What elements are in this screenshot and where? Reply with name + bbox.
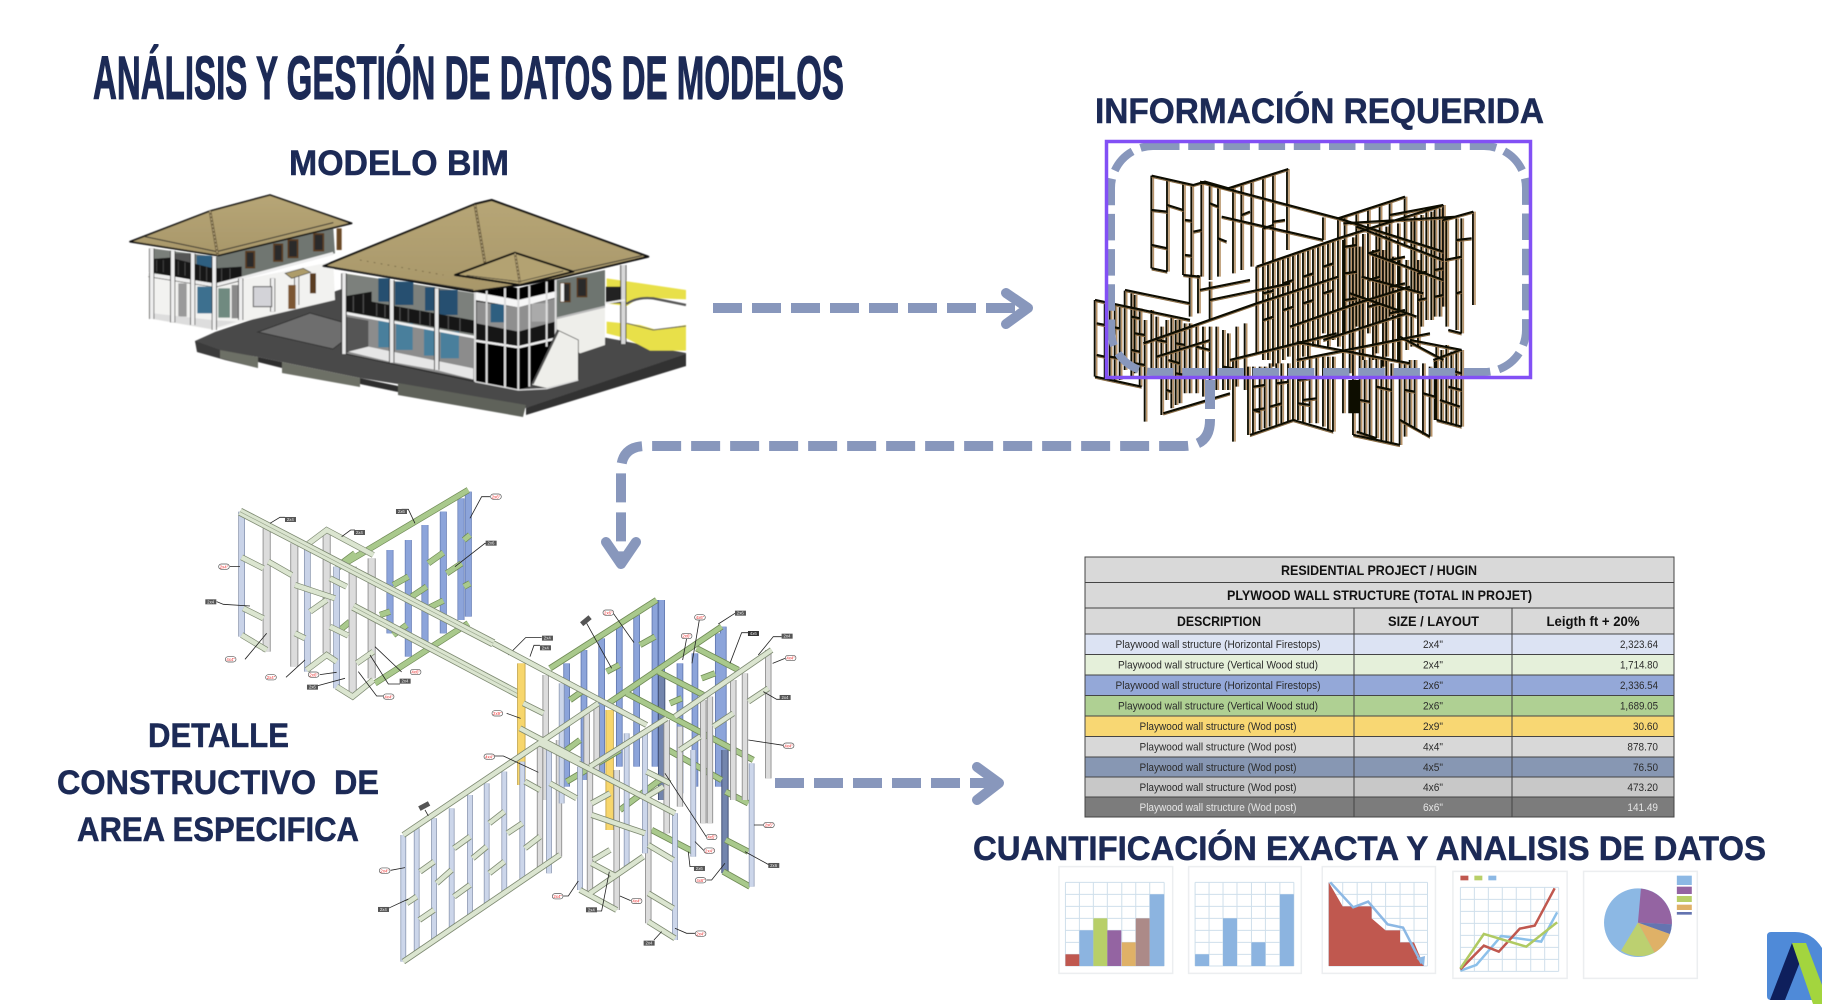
leader lines and tags: 4x4" bbox=[384, 694, 393, 699]
table: plywood wall structure quantities: Leigth ft + 20% bbox=[1546, 613, 1640, 629]
leader lines and tags: 4x6" bbox=[696, 878, 705, 883]
table: plywood wall structure quantities: 4x5" bbox=[1423, 762, 1443, 774]
illustration: detailed wall framing, left cluster bbox=[205, 490, 553, 699]
leader lines and tags: 4x6" bbox=[696, 615, 705, 620]
table: plywood wall structure quantities: Playwood wall structure (Wod post) bbox=[1140, 742, 1296, 754]
leader lines and tags: 4x4" bbox=[786, 656, 795, 661]
arrow: model to required information bbox=[713, 293, 1028, 324]
blue studs bbox=[567, 600, 723, 793]
grey studs bbox=[267, 528, 372, 697]
leader lines and tags: 2x9" bbox=[493, 711, 502, 716]
table: plywood wall structure quantities: 141.49 bbox=[1627, 802, 1658, 814]
leader lines and tags: 4x4" bbox=[485, 754, 494, 759]
table: plywood wall structure quantities: 6x6" bbox=[1423, 802, 1443, 814]
right house bbox=[323, 200, 686, 390]
long beams bbox=[240, 512, 523, 697]
table: plywood wall structure quantities: Playwood wall structure (Horizontal Firestops) bbox=[1116, 680, 1320, 692]
table: plywood wall structure quantities: 1,689.05 bbox=[1620, 700, 1658, 712]
mini charts row bbox=[1059, 867, 1697, 978]
data rows: Playwood wall structure (Horizontal Firestops) bbox=[1116, 639, 1320, 651]
leader lines and tags: 4x4" bbox=[632, 899, 641, 904]
leader lines and tags: 2x4 bbox=[207, 599, 215, 604]
table: plywood wall structure quantities: 2x6" bbox=[1423, 700, 1443, 712]
leader lines and tags: 2x4" bbox=[220, 564, 229, 569]
leader lines and tags: 2x6" bbox=[604, 610, 613, 615]
table: plywood wall structure quantities: 76.50 bbox=[1633, 762, 1658, 774]
leader lines and tags: 2x4 bbox=[544, 636, 551, 641]
table: plywood wall structure quantities: 1,714.80 bbox=[1620, 660, 1658, 672]
chart: pie with legend bbox=[1584, 871, 1697, 978]
table: plywood wall structure quantities: SIZE / LAYOUT bbox=[1388, 613, 1479, 629]
table: plywood wall structure quantities: 2x4" bbox=[1423, 639, 1443, 651]
leader lines and tags: 2x6" bbox=[309, 672, 318, 677]
chart: three-line graph bbox=[1453, 871, 1567, 978]
green plates bbox=[550, 600, 753, 887]
ground slab and footings bbox=[195, 288, 686, 417]
leader lines and tags: 2x6" bbox=[682, 634, 691, 639]
green plates bbox=[337, 490, 470, 683]
heading: detalle constructivo de area especifica: CONSTRUCTIVO DE bbox=[57, 764, 379, 802]
table: plywood wall structure quantities: 473.20 bbox=[1627, 782, 1658, 794]
table: plywood wall structure quantities: Playwood wall structure (Wod post) bbox=[1140, 721, 1296, 733]
pale blue studs bbox=[403, 683, 752, 962]
leader lines and tags: 2x4" bbox=[705, 848, 714, 853]
row backgrounds bbox=[1085, 557, 1674, 817]
heading: información requerida: INFORMACIÓN REQUERIDA bbox=[1095, 91, 1544, 131]
table: plywood wall structure quantities: Playwood wall structure (Vertical Wood stud) bbox=[1118, 660, 1318, 672]
heading: detalle constructivo de area especifica bbox=[57, 717, 379, 849]
leader lines and tags: 4x6" bbox=[411, 670, 420, 675]
leader lines and tags: 2x4" bbox=[553, 894, 562, 899]
leader lines and tags: 2x4 bbox=[783, 634, 791, 639]
table: plywood wall structure quantities: 2,323.64 bbox=[1620, 639, 1658, 651]
illustration: detailed wall framing, right cluster bbox=[378, 600, 796, 962]
heading: cuantificación exacta y analisis de datos: CUANTIFICACIÓN EXACTA Y ANALISIS DE DATOS bbox=[973, 830, 1766, 868]
table: plywood wall structure quantities: 2x6" bbox=[1423, 680, 1443, 692]
header text: RESIDENTIAL PROJECT / HUGIN bbox=[1281, 562, 1477, 578]
table: plywood wall structure quantities: 2x9" bbox=[1423, 721, 1443, 733]
logo bbox=[1767, 932, 1822, 1004]
table: plywood wall structure quantities: 4x4" bbox=[1423, 742, 1443, 754]
grey studs bbox=[540, 650, 768, 923]
leader lines and tags: 2x4" bbox=[267, 675, 276, 680]
blue studs bbox=[390, 492, 468, 657]
table: plywood wall structure quantities: Playwood wall structure (Wod post) bbox=[1140, 782, 1296, 794]
heading: modelo BIM: MODELO BIM bbox=[289, 144, 509, 183]
table: plywood wall structure quantities: DESCRIPTION bbox=[1177, 613, 1261, 629]
leader lines and tags: 2x4 bbox=[380, 907, 387, 912]
leader lines and tags: 4x4" bbox=[226, 657, 235, 662]
table: plywood wall structure quantities: Playwood wall structure (Vertical Wood stud) bbox=[1118, 700, 1318, 712]
chart: blue bars bbox=[1189, 867, 1301, 973]
leader lines and tags: 2x6" bbox=[765, 823, 774, 828]
illustration: timber framing model bbox=[1095, 169, 1475, 447]
table: plywood wall structure quantities: Playwood wall structure (Wod post) bbox=[1140, 762, 1296, 774]
leader lines and tags: 2x4" bbox=[696, 931, 705, 936]
leader lines and tags: 2x6 bbox=[487, 541, 495, 546]
leader lines and tags: 2x6 bbox=[737, 611, 744, 616]
leader lines and tags: 2x6" bbox=[492, 494, 501, 499]
title: ANÁLISIS Y GESTIÓN DE DATOS DE MODELOS bbox=[93, 44, 844, 112]
table: plywood wall structure quantities: 30.60 bbox=[1633, 721, 1658, 733]
leader lines and tags: 2x4 bbox=[645, 941, 653, 946]
grid lines bbox=[1085, 557, 1674, 817]
leader lines and tags: 2x6 bbox=[309, 685, 316, 690]
light beams bbox=[242, 530, 373, 697]
leader lines and tags bbox=[205, 494, 553, 699]
leader lines and tags: 2x6 bbox=[696, 866, 703, 871]
arrow: construction detail to quantification table bbox=[775, 767, 999, 800]
leader lines and tags: 2x4 bbox=[542, 645, 549, 650]
chart: declining area with arrow bbox=[1322, 867, 1435, 973]
table: plywood wall structure quantities: 4x6" bbox=[1423, 782, 1443, 794]
table: plywood wall structure quantities: PLYWOOD WALL STRUCTURE (TOTAL IN PROJET) bbox=[1227, 587, 1532, 603]
leader lines and tags: 2x6 bbox=[770, 863, 778, 868]
leader lines and tags: 4x6 bbox=[750, 631, 757, 636]
leader lines and tags bbox=[378, 610, 796, 946]
table: plywood wall structure quantities bbox=[1085, 557, 1674, 817]
leader lines and tags: 2x4 bbox=[287, 517, 294, 522]
leader lines and tags: 2x4 bbox=[588, 907, 595, 912]
heading: detalle constructivo de area especifica: AREA ESPECIFICA bbox=[77, 811, 359, 849]
yellow posts bbox=[521, 663, 610, 830]
leader lines and tags: 2x4" bbox=[380, 868, 389, 873]
leader lines and tags: 2x4 bbox=[356, 530, 363, 535]
table: plywood wall structure quantities: Playwood wall structure (Wod post) bbox=[1140, 802, 1296, 814]
heading: detalle constructivo de area especifica: DETALLE bbox=[148, 717, 289, 755]
table: plywood wall structure quantities: 2,336.54 bbox=[1620, 680, 1658, 692]
table: plywood wall structure quantities: 2x4" bbox=[1423, 660, 1443, 672]
leader lines and tags: 4x4" bbox=[784, 743, 793, 748]
table: plywood wall structure quantities: 878.70 bbox=[1627, 742, 1658, 754]
light beams and blocking bbox=[403, 643, 772, 962]
chart: multicolour bars bbox=[1059, 867, 1173, 973]
leader lines and tags: 2x6 bbox=[398, 509, 405, 514]
selection frame: purple rectangle with dashed rounded outline bbox=[1106, 142, 1530, 378]
leader lines and tags: 4x5" bbox=[707, 835, 716, 840]
leader lines and tags: 2x4 bbox=[781, 695, 789, 700]
leader lines and tags: 2x4 bbox=[401, 679, 409, 684]
left house bbox=[130, 195, 352, 330]
illustration: BIM house model bbox=[130, 195, 686, 417]
arrow: required information to construction detail bbox=[606, 380, 1210, 564]
